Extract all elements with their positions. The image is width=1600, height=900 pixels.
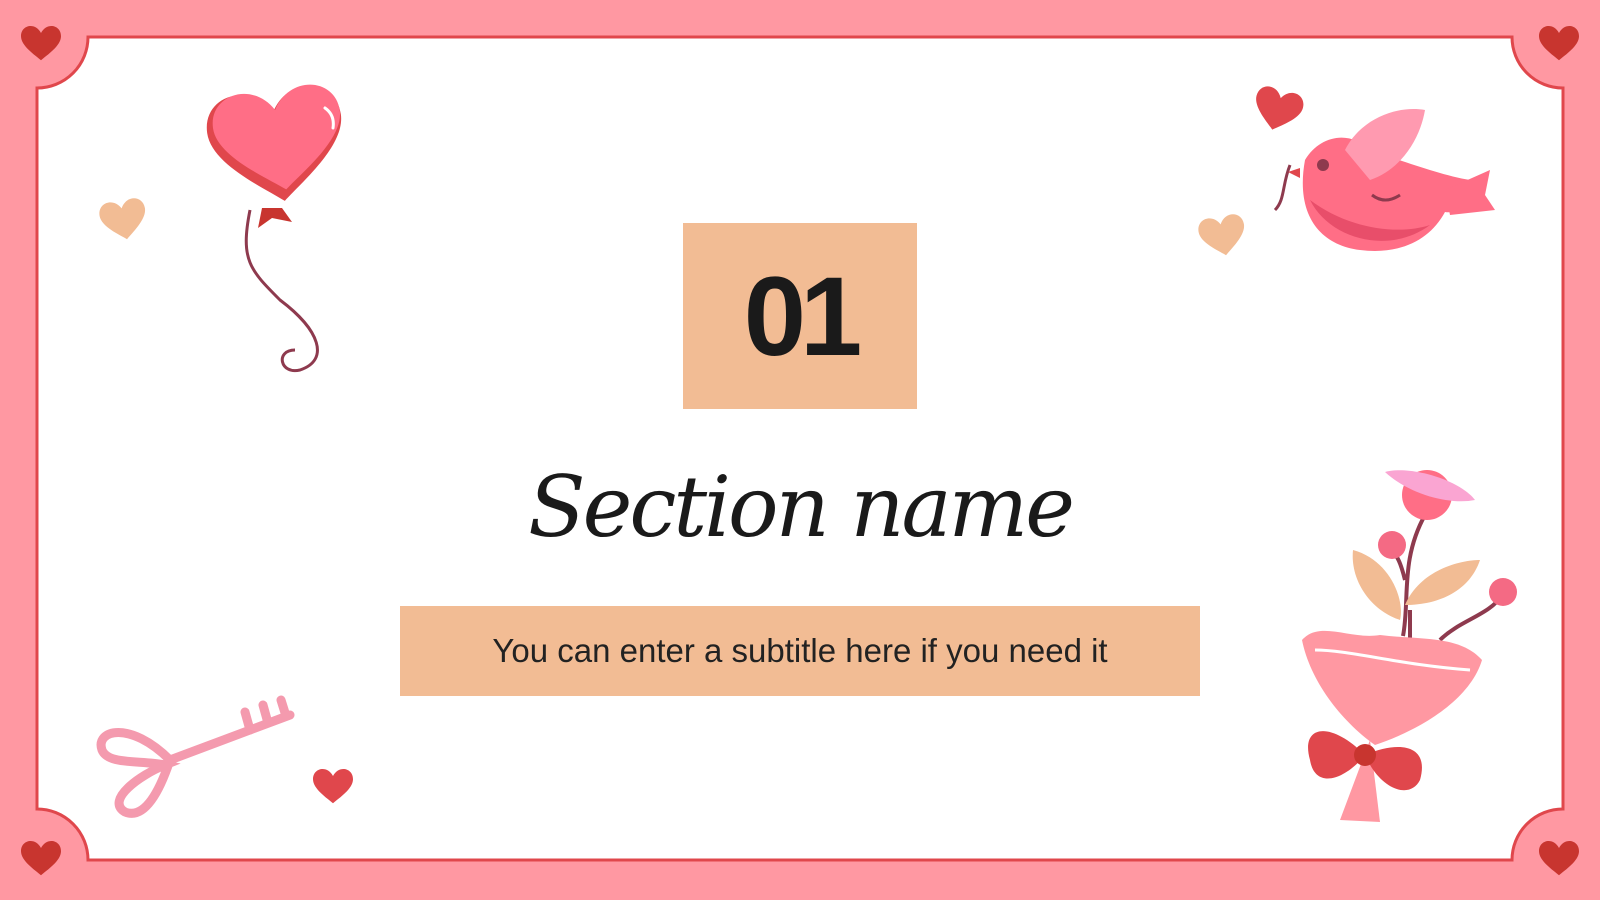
- number box: 01: [744, 254, 856, 378]
- icon: heart balloon: [203, 81, 352, 371]
- icon: bird: [1249, 84, 1495, 251]
- icon: beige hearts: [98, 197, 1249, 259]
- subtitle box: [400, 606, 1200, 696]
- icon: bouquet: [1302, 470, 1517, 822]
- icon: key: [101, 700, 290, 813]
- number box: [683, 223, 917, 409]
- title: Section name: [528, 458, 1072, 556]
- icon: red heart: [313, 769, 353, 803]
- subtitle box: You can enter a subtitle here if you need it: [492, 632, 1108, 669]
